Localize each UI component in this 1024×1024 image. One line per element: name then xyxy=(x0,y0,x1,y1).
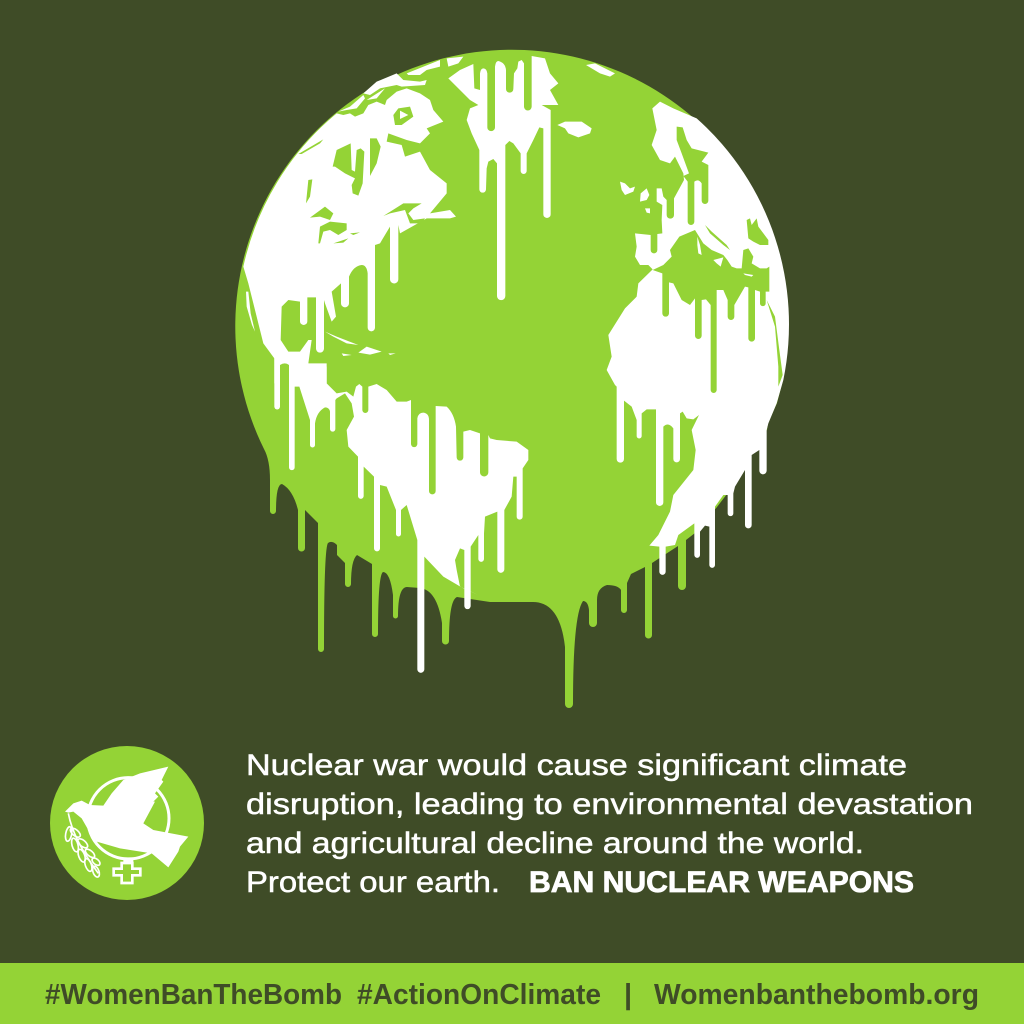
Caribbean islands xyxy=(325,332,396,356)
footer band with hashtags and website: #ActionOnClimate xyxy=(357,979,601,1011)
green globe with drips xyxy=(235,50,788,708)
message text block: Nuclear war would cause significant climate xyxy=(246,749,907,782)
message text block: and agricultural decline around the world. xyxy=(246,827,864,860)
continent: Greenland xyxy=(448,56,558,300)
Mediterranean islands xyxy=(697,237,753,277)
olive branch xyxy=(64,813,101,878)
island inside Foxe Basin xyxy=(400,111,408,119)
lakes, bays and arctic channels xyxy=(298,107,425,243)
message text block xyxy=(246,749,973,899)
Baja sliver xyxy=(246,292,255,332)
women's symbol ring xyxy=(88,778,169,859)
melting globe illustration xyxy=(235,50,789,708)
continent: North America xyxy=(243,57,463,383)
footer band with hashtags and website: Womenbanthebomb.org xyxy=(654,979,979,1011)
message text block: disruption, leading to environmental devastation xyxy=(246,788,973,821)
left drip xyxy=(274,357,280,409)
footer band with hashtags and website xyxy=(0,963,1024,1024)
message text block: Protect our earth. xyxy=(246,866,500,899)
British Isles xyxy=(620,182,650,213)
Svalbard xyxy=(586,63,615,77)
Iceland xyxy=(557,122,592,137)
footer band with hashtags and website: #WomenBanTheBomb xyxy=(45,979,342,1011)
footer band with hashtags and website: | xyxy=(624,979,632,1011)
Baltic, Mediterranean, Black and Red seas xyxy=(653,127,783,393)
continent: Central and South America xyxy=(274,357,528,673)
women's symbol stem and cross xyxy=(112,857,142,884)
continent: Europe, Asia and Africa xyxy=(557,63,789,575)
logo: dove and women's symbol badge xyxy=(50,746,204,900)
Arctic islands xyxy=(338,57,463,112)
message text block: BAN NUCLEAR WEAPONS xyxy=(529,866,914,899)
dove xyxy=(65,767,188,867)
